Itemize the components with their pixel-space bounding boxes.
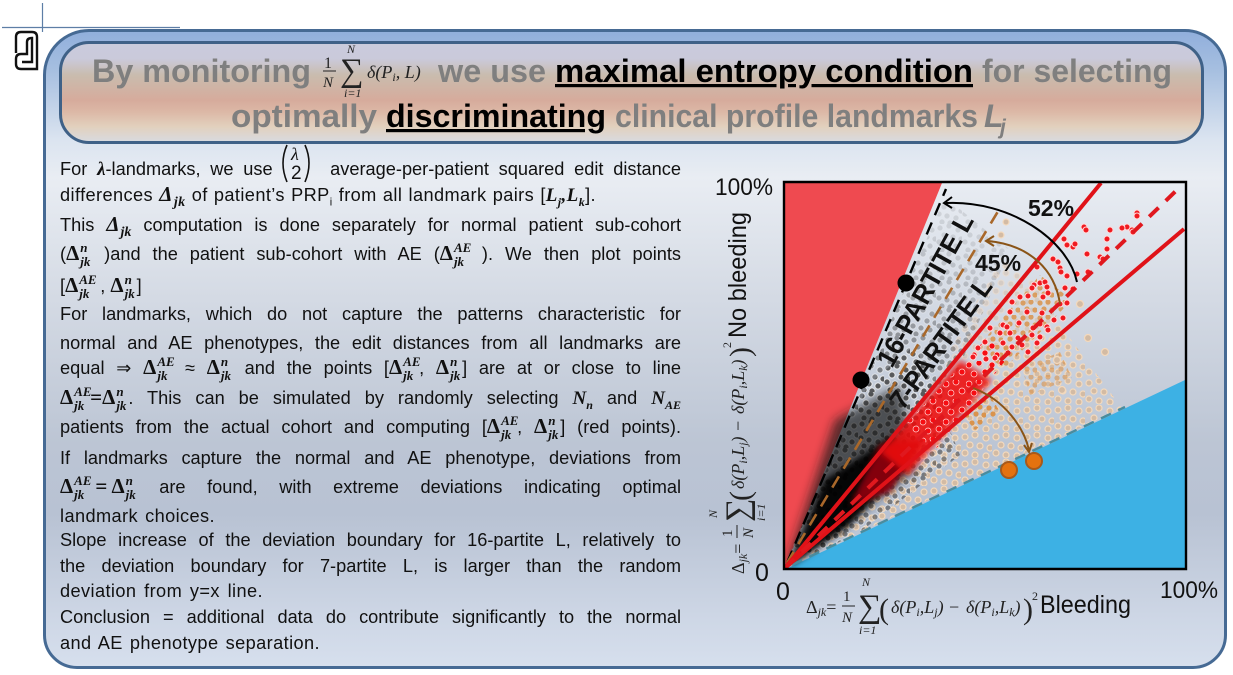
axis label: y formula and No bleeding	[706, 212, 768, 574]
text block: explanation: Δ	[534, 414, 547, 438]
axis tick: y 0: 0	[755, 559, 769, 587]
axis label: y formula and No bleeding: =	[728, 544, 748, 554]
text block: explanation: Δ = Δ	[60, 474, 125, 498]
axis label: x formula and Bleeding: 2	[1032, 589, 1038, 603]
axis tick: y 100%: 100%	[715, 174, 773, 201]
text block: explanation: . This can be simulated by randomly selecting Nn and NAE	[128, 388, 681, 412]
title	[92, 42, 1172, 139]
axis label: y formula and No bleeding: N	[706, 509, 720, 519]
scatter: observed points	[786, 197, 1140, 568]
axis label: x formula and Bleeding: δ(P	[891, 597, 916, 617]
line: upper red deviation boundary	[785, 183, 1101, 568]
axis label: x formula and Bleeding: 1	[843, 589, 850, 605]
text block: explanation: equal ⇒ ≈ and the points [ , ] are at or close to line	[60, 358, 681, 378]
axis label: y formula and No bleeding: )	[728, 436, 749, 443]
axis label: y formula and No bleeding: )	[728, 359, 749, 366]
text block: explanation: jk	[221, 368, 231, 383]
title: discriminating	[386, 98, 606, 134]
label: 52 percent: 52%	[1028, 195, 1074, 221]
text block: explanation: jk	[80, 254, 90, 269]
text block: explanation: deviation from y=x line.	[60, 581, 263, 601]
axis label: x formula and Bleeding: Bleeding	[1040, 591, 1131, 619]
axis label: x formula and Bleeding: N	[861, 575, 871, 589]
text block: explanation: n	[548, 413, 555, 428]
text block: explanation	[60, 159, 681, 653]
label: 16-partite L: 16-PARTITE L	[871, 209, 980, 372]
axis label: y formula and No bleeding: k	[736, 365, 750, 371]
title: optimally	[231, 98, 377, 134]
icon: corner glyph	[14, 30, 38, 70]
axis label: y formula and No bleeding: ,L	[728, 371, 748, 385]
text block: explanation: n	[116, 384, 124, 399]
plot frame	[784, 182, 1186, 569]
text block: explanation: landmark choices.	[60, 506, 215, 526]
axis label: y formula and No bleeding: 1	[720, 530, 736, 537]
axis label: x formula and Bleeding: Δ	[806, 597, 818, 617]
binomial coefficient	[282, 144, 310, 184]
title: clinical profile landmarks	[615, 98, 978, 134]
text block: explanation: ( )and the patient sub-cohort with AE ( ). We then plot points	[60, 244, 681, 264]
axis label: y formula and No bleeding: i	[736, 385, 750, 389]
text block: explanation: and AE phenotype separation.	[60, 633, 320, 653]
text block: explanation: Δ =Δ	[60, 385, 115, 409]
text block: explanation: AE	[157, 354, 175, 369]
axis label: x formula and Bleeding: i	[991, 605, 995, 619]
title: δ(P	[367, 62, 392, 82]
title: L	[984, 98, 1004, 134]
text block: explanation: Δ	[436, 355, 449, 379]
axis label: x formula and Bleeding: k	[1009, 605, 1015, 619]
axis label: y formula and No bleeding: ,L	[728, 446, 748, 460]
text block: explanation: This computation is done separately for normal patient sub-cohort	[60, 215, 681, 235]
binomial coefficient: 2	[291, 163, 302, 184]
text block: explanation: jk	[501, 427, 511, 442]
axis label: x formula and Bleeding: j	[932, 605, 938, 619]
axis label: y formula and No bleeding: Δ	[728, 562, 748, 574]
text block: explanation: Conclusion = additional data do contribute significantly to the normal	[60, 607, 681, 627]
text block: explanation: n	[221, 354, 228, 369]
text block: explanation: Δ	[143, 355, 156, 379]
axis label: y formula and No bleeding: j	[736, 442, 750, 448]
text block: explanation: AE	[454, 240, 471, 255]
panel: title banner	[59, 41, 1204, 144]
axis label: y formula and No bleeding: δ(P	[728, 464, 748, 489]
arrow: 52% black arc	[944, 197, 1077, 282]
text block: explanation: Δ	[65, 273, 78, 297]
axis label: y formula and No bleeding: No bleeding	[724, 212, 752, 338]
text block: explanation: jk	[548, 427, 558, 442]
marker: orange extreme points	[1001, 453, 1042, 478]
binomial coefficient: λ	[290, 144, 299, 164]
axis label: x formula and Bleeding: δ(P	[966, 597, 991, 617]
axis label: y formula and No bleeding: )	[724, 347, 757, 357]
text block: explanation: AE	[501, 413, 518, 428]
text block: explanation: jk	[79, 286, 89, 301]
label: 7-partite L: 7-PARTITE L	[884, 272, 998, 415]
arrow: 45% brown arc	[986, 236, 1060, 304]
axis label: x formula and Bleeding: )	[937, 597, 944, 618]
title: we use	[437, 53, 546, 89]
axis label: x formula and Bleeding: ,L	[995, 597, 1009, 617]
axis label: y formula and No bleeding: i=1	[754, 504, 768, 521]
text block: explanation: n	[125, 272, 132, 287]
text block: explanation: jk	[157, 368, 167, 383]
title: ∑	[340, 53, 364, 89]
zone: blue excluded region	[788, 380, 1185, 568]
axis label: x formula and Bleeding: N	[841, 610, 853, 626]
text block: explanation: n	[126, 473, 133, 488]
text block: explanation: Δ	[66, 241, 79, 265]
line: red dashed y=x line	[785, 188, 1179, 568]
title: for selecting	[982, 53, 1172, 89]
text block: explanation: If landmarks capture the normal and AE phenotype, deviations from	[60, 448, 681, 468]
text block: explanation: AE	[403, 354, 420, 369]
text block: explanation: AE	[74, 473, 92, 488]
text block: explanation: Δ	[440, 241, 453, 265]
axis label: x formula and Bleeding: jk	[816, 605, 827, 619]
axis label: y formula and No bleeding: N	[741, 527, 757, 539]
text block: explanation: AE	[79, 272, 97, 287]
boundary: 16-partite black dashed line	[787, 189, 946, 563]
text block: explanation: n	[450, 354, 457, 369]
text block: explanation: Δ	[487, 414, 500, 438]
text block: explanation: jk	[403, 368, 413, 383]
marker: black extreme points	[852, 274, 914, 388]
axis label: y formula and No bleeding: −	[728, 421, 748, 431]
axis label: x formula and Bleeding: −	[949, 597, 959, 617]
title: By monitoring	[92, 53, 311, 89]
text block: explanation: n	[80, 240, 87, 255]
text block: explanation: Δ	[110, 273, 124, 297]
text block: explanation: jk	[74, 487, 84, 502]
zone: red excluded region	[785, 183, 942, 568]
line: lower red deviation boundary	[785, 229, 1184, 568]
axis label: x formula and Bleeding: (	[879, 593, 889, 626]
text block: explanation: jk	[454, 254, 464, 269]
title: maximal entropy condition	[555, 53, 973, 89]
text block: explanation: For λ-landmarks, we use average-per-patient squared edit distance	[60, 159, 681, 180]
axis tick: x 0: 0	[776, 578, 790, 606]
axis label: x formula and Bleeding: =	[826, 597, 836, 617]
axis label: x formula and Bleeding	[806, 575, 1131, 637]
axis label: x formula and Bleeding: )	[1014, 597, 1021, 618]
text block: explanation: patients from the actual cohort and computing [ , ] (red points).	[60, 417, 681, 437]
text block: explanation: Δjk	[159, 182, 186, 210]
title: 1	[324, 55, 332, 72]
text block: explanation: Slope increase of the deviation boundary for 16-partite L, relatively to	[60, 530, 681, 550]
text block: explanation: AE	[74, 384, 92, 399]
boundary: blue dashed line	[792, 407, 1125, 565]
axis label: x formula and Bleeding: )	[1023, 593, 1033, 626]
text block: explanation: [ , ]	[60, 276, 142, 296]
axis label: x formula and Bleeding: i	[916, 605, 920, 619]
arrow: lower brown arc	[973, 388, 1032, 452]
text block: explanation: For landmarks, which do not capture the patterns characteristic for	[60, 304, 681, 324]
axis label: x formula and Bleeding: i=1	[859, 623, 876, 637]
axis label: y formula and No bleeding: (	[724, 491, 757, 501]
text block: explanation: jk	[74, 398, 84, 413]
text block: explanation: jk	[450, 368, 460, 383]
text block: explanation: Δ	[389, 355, 402, 379]
text block: explanation: jk	[126, 487, 136, 502]
axis label: y formula and No bleeding: 2	[720, 342, 734, 348]
text block: explanation: Δjk	[106, 212, 131, 240]
title: N	[346, 42, 356, 56]
text block: explanation: jk	[125, 286, 135, 301]
title: i=1	[344, 86, 361, 100]
title: , L)	[396, 62, 421, 83]
chart: scatter plot of edit distance differences	[710, 178, 1218, 634]
text block: explanation: the deviation boundary for 7-partite L, is larger than the random	[60, 556, 681, 576]
text block: explanation: differences of patient’s PRPi from all landmark pairs [Lj,Lk].	[60, 185, 596, 209]
axis label: x formula and Bleeding: ∑	[858, 589, 882, 625]
title: i	[392, 70, 396, 84]
text block: explanation: normal and AE phenotypes, the edit distances from all landmarks are	[60, 333, 681, 353]
axis tick: x 100%: 100%	[1160, 577, 1218, 604]
crop marks	[2, 3, 180, 32]
label: 45 percent: 45%	[975, 250, 1021, 276]
axis label: y formula and No bleeding: δ(P	[728, 389, 748, 414]
text block: explanation: Δ	[207, 355, 220, 379]
title: N	[322, 75, 334, 91]
axis label: y formula and No bleeding: i	[736, 460, 750, 464]
boundary: 7-partite brown dashed line	[787, 208, 1000, 563]
text block: explanation: jk	[116, 398, 126, 413]
axis label: x formula and Bleeding: ,L	[920, 597, 934, 617]
title: j	[997, 116, 1007, 139]
text block: explanation: are found, with extreme deviations indicating optimal	[159, 477, 681, 497]
axis label: y formula and No bleeding: jk	[736, 553, 750, 564]
axis label: y formula and No bleeding: ∑	[720, 498, 756, 522]
